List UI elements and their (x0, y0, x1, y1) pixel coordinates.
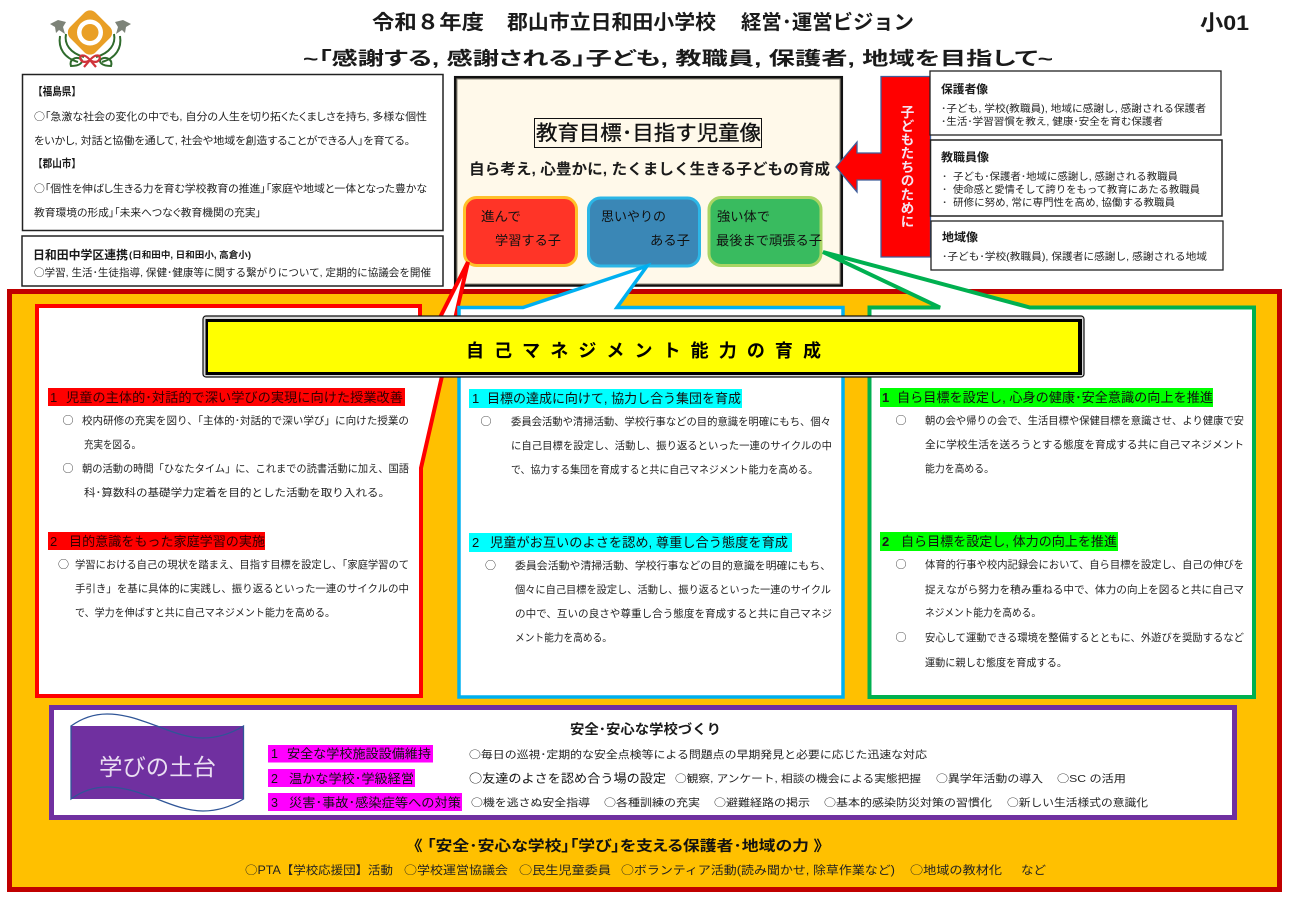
heading: support from parents and community: 《 「安全･安心な学校」「学び」を支える保護者･地域の力 》 (414, 837, 822, 855)
text: caring 2 bullets: 委員会活動や清掃活動、学校行事などの目的意識を明確にもち、 (515, 559, 831, 572)
card: learning child (464, 198, 576, 266)
text: learning 2 bullets: 手引き」を基に具体的に実践し、振り返るといった一連のサイクルの中 (75, 582, 409, 595)
row: classroom management: ○友達のよさを認め合う場の設定 (469, 770, 666, 786)
text: goal statement: 自ら考え, 心豊かに, たくましく生きる子どもの育成 (469, 160, 830, 178)
heading: health 1: 1 (882, 390, 889, 405)
card: learning child: 進んで (481, 209, 521, 224)
row: classroom management: ○SC の活用 (1057, 771, 1126, 786)
panel: prefecture and city goals (22, 74, 443, 230)
row: facilities: 安全な学校施設設備維持 (287, 746, 431, 761)
row: disaster and infection: ○避難経路の掲示 (714, 795, 810, 810)
heading: learning 2: 2 (50, 534, 57, 549)
text: health 2 bullets: ○ (896, 556, 906, 572)
text: health 2 bullets: 体育的行事や校内記録会において、自ら目標を設定し、自己の伸びを (925, 558, 1244, 571)
text: support activities: ○ボランティア活動(読み聞かせ, 除草作業など) (621, 862, 895, 878)
text: caring 2 bullets (485, 557, 832, 644)
heading: health 1: 自ら目標を設定し, 心身の健康･安全意識の向上を推進 (897, 390, 1213, 405)
text: caring 1 bullets: 委員会活動や清掃活動、学校行事などの目的意識を明確にもち、個々 (511, 415, 831, 428)
panel: community image: ･子ども･学校(教職員), 保護者に感謝し, 感謝される地域 (942, 250, 1207, 263)
text: support activities: ○地域の教材化 (910, 862, 1003, 878)
panel: staff image: ･ 子ども･保護者･地域に感謝し, 感謝される教職員 (942, 170, 1178, 183)
row: disaster and infection: ○機を逃さぬ安全指導 (471, 795, 591, 810)
text: support activities: ○民生児童委員 (519, 862, 612, 878)
text: caring 2 bullets: の中で、互いの良さや尊重し合う態度を育成すると共に自己マネジ (515, 607, 832, 620)
card: strong child: 強い体で (717, 209, 770, 224)
heading: Koriyama: 【郡山市】 (33, 156, 81, 170)
heading: district cooperation: 日和田中学区連携 (33, 247, 128, 262)
text: health 2 bullets: 捉えながら努力を積み重ねる中で、体力の向上を図ると共に自己マ (925, 583, 1244, 596)
arrow: for the children: 子どもたちのために (898, 105, 914, 229)
heading: caring 1: 1 (472, 391, 479, 406)
heading: Fukushima: 【福島県】 (33, 84, 81, 98)
panel: educational goals (455, 77, 842, 286)
text: caring 1 bullets: に自己目標を設定し、活動し、振り返るといった一連のサイクルの中 (511, 439, 832, 452)
heading: caring 2: 2 (472, 535, 479, 550)
heading: learning 2: 目的意識をもった家庭学習の実施 (69, 534, 265, 549)
panel: junior high district cooperation (22, 236, 443, 286)
panel: parents image: ･生活･学習習慣を教え, 健康･安全を育む保護者 (941, 115, 1163, 128)
heading: district cooperation: (日和田中, 日和田小, 高倉小) (129, 249, 251, 260)
text: health 2 bullets: ○ (896, 629, 906, 645)
card: caring child: ある子 (650, 233, 690, 248)
row: disaster and infection: 3 (271, 796, 278, 810)
panel: community image: 地域像 (942, 230, 979, 244)
row: disaster and infection: ○基本的感染防災対策の習慣化 (824, 795, 993, 810)
icon: wave banner: 学びの土台 (99, 754, 216, 780)
school emblem (50, 7, 131, 67)
text: Fukushima goal: をいかし, 対話と協働を通して, 社会や地域を創造することができる人」を育てる。 (34, 134, 410, 147)
text: Fukushima goal (34, 109, 427, 147)
text: learning 1 bullets: ○ (62, 412, 74, 428)
title: 郡山市立日和田小学校 (507, 11, 716, 34)
text: health 1 bullets: 能力を高める。 (925, 462, 994, 475)
document code: 小01 (1200, 12, 1249, 35)
panel: community image (931, 221, 1223, 270)
text: health 1 bullets: 全に学校生活を送ろうとする態度を育成する共に自己マネジメント (925, 438, 1244, 451)
panel: parents image (930, 71, 1221, 135)
text: caring 2 bullets: ○ (485, 557, 496, 573)
text: support activities: など (1021, 864, 1047, 877)
card: caring child (588, 198, 700, 266)
row: facilities: ○毎日の巡視･定期的な安全点検等による問題点の早期発見と必要に応じた迅速な対応 (469, 747, 928, 762)
row: classroom management: ○異学年活動の導入 (936, 771, 1044, 786)
heading: learning 1: 1 (50, 390, 57, 405)
text: learning 1 bullets (62, 412, 409, 499)
row: facilities (268, 745, 928, 762)
text: learning 1 bullets: ○ (62, 460, 74, 476)
row: classroom management: 温かな学校･学級経営 (289, 771, 414, 786)
text: learning 1 bullets: 科･算数科の基礎学力定着を目的とした活動を取り入れる。 (84, 486, 390, 499)
arrow: for the children (836, 76, 930, 257)
panel: foundation of learning (52, 708, 1234, 818)
text: health 2 bullets (896, 556, 1244, 669)
panel: parents image: 保護者像 (941, 82, 989, 96)
text: support activities (245, 862, 1047, 878)
text: health 1 bullets (896, 412, 1244, 475)
panel: learning column (37, 262, 468, 696)
text: health 2 bullets: ネジメント能力を高める。 (925, 606, 1041, 619)
panel: orange frame (10, 292, 1280, 890)
row: classroom management (268, 769, 1126, 787)
card: caring child: 思いやりの (601, 209, 666, 224)
icon: wave banner (71, 714, 244, 811)
panel: staff image: ･ 使命感と愛情そして誇りをもって教育にあたる教職員 (942, 183, 1200, 196)
banner: self-management: 自己マネジメント能力の育成 (466, 340, 821, 361)
text: district cooperation: ○学習, 生活･生徒指導, 保健･健康等に関する繋がりについて, 定期的に協議会を開催 (34, 265, 431, 280)
title: 令和８年度 (372, 11, 484, 34)
title (372, 11, 914, 34)
banner: self-management (203, 316, 1084, 377)
text: Koriyama goal (34, 181, 427, 219)
subtitle: ~「感謝する, 感謝される」子ども, 教職員, 保護者, 地域を目指して~ (303, 48, 1053, 69)
text: Koriyama goal: 教育環境の形成」「未来へつなぐ教育機関の充実」 (34, 206, 261, 219)
panel: staff image (930, 140, 1222, 216)
panel: parents image: ･子ども, 学校(教職員), 地域に感謝し, 感謝される保護者 (941, 102, 1206, 115)
panel: caring column (459, 266, 843, 697)
heading: district cooperation (33, 247, 251, 262)
row: facilities: 1 (271, 747, 278, 761)
text: caring 1 bullets (480, 413, 832, 476)
card: learning child: 学習する子 (495, 233, 561, 248)
row: classroom management: 2 (271, 772, 278, 786)
text: support activities: ○学校運営協議会 (404, 862, 509, 878)
row: classroom management: ○観察, アンケート, 相談の機会による実態把握 (675, 771, 922, 786)
text: caring 1 bullets: で、協力する集団を育成すると共に自己マネジメント能力を高める。 (511, 463, 818, 476)
heading: health 2: 2 (882, 534, 889, 549)
text: learning 2 bullets (58, 556, 409, 619)
heading: health 2: 自ら目標を設定し, 体力の向上を推進 (901, 534, 1117, 549)
text: learning 1 bullets: 朝の活動の時間「ひなたタイム」に、これまでの読書活動に加え、国語 (82, 462, 409, 475)
text: health 2 bullets: 安心して運動できる環境を整備するとともに、外遊びを奨励するなど (925, 631, 1244, 644)
row: disaster and infection: 災害･事故･感染症等への対策 (289, 795, 462, 810)
heading: educational goal: 教育目標･目指す児童像 (536, 122, 761, 145)
card: strong child: 最後まで頑張る子 (716, 233, 822, 248)
text: health 2 bullets: 運動に親しむ態度を育成する。 (925, 656, 1067, 669)
text: caring 2 bullets: 個々に自己目標を設定し、活動し、振り返るといった一連のサイクル (515, 583, 831, 596)
title: 経営･運営ビジョン (741, 11, 914, 34)
heading: caring 1: 目標の達成に向けて, 協力し合う集団を育成 (487, 391, 741, 406)
text: caring 1 bullets: ○ (480, 413, 492, 429)
row: disaster and infection: ○各種訓練の充実 (604, 795, 701, 810)
text: Koriyama goal: ○「個性を伸ばし生きる力を育む学校教育の推進」「家庭や地域と一体となった豊かな (34, 181, 427, 196)
text: learning 1 bullets: 充実を図る。 (84, 438, 141, 451)
panel: staff image: ･ 研修に努め, 常に専門性を高め, 協働する教職員 (942, 196, 1175, 209)
text: health 1 bullets: 朝の会や帰りの会で、生活目標や保健目標を意識させ、より健康で安 (925, 414, 1244, 427)
heading: learning 1: 児童の主体的･対話的で深い学びの実現に向けた授業改善 (66, 390, 403, 405)
heading: caring 2: 児童がお互いのよさを認め, 尊重し合う態度を育成 (490, 535, 788, 550)
text: learning 2 bullets: ○ (58, 556, 69, 572)
text: Fukushima goal: ○「急激な社会の変化の中でも, 自分の人生を切り拓くたくましさを持ち, 多様な個性 (34, 109, 427, 124)
text: learning 2 bullets: 学習における自己の現状を踏まえ、目指す目標を設定し、「家庭学習のて (75, 558, 409, 571)
card: strong child (709, 198, 822, 266)
text: learning 1 bullets: 校内研修の充実を図り、「主体的･対話的で深い学び」に向けた授業の (82, 414, 409, 427)
row: disaster and infection: ○新しい生活様式の意識化 (1007, 795, 1149, 810)
text: support activities: ○PTA【学校応援団】活動 (245, 862, 393, 878)
panel: staff image: 教職員像 (941, 150, 990, 164)
text: health 1 bullets: ○ (896, 412, 906, 428)
text: learning 2 bullets: で、学力を伸ばすと共に自己マネジメント能力を高める。 (75, 606, 335, 619)
panel: health column (823, 252, 1254, 697)
heading: safe school: 安全･安心な学校づくり (570, 721, 721, 737)
row: disaster and infection (268, 793, 1149, 811)
text: caring 2 bullets: メント能力を高める。 (515, 631, 612, 644)
